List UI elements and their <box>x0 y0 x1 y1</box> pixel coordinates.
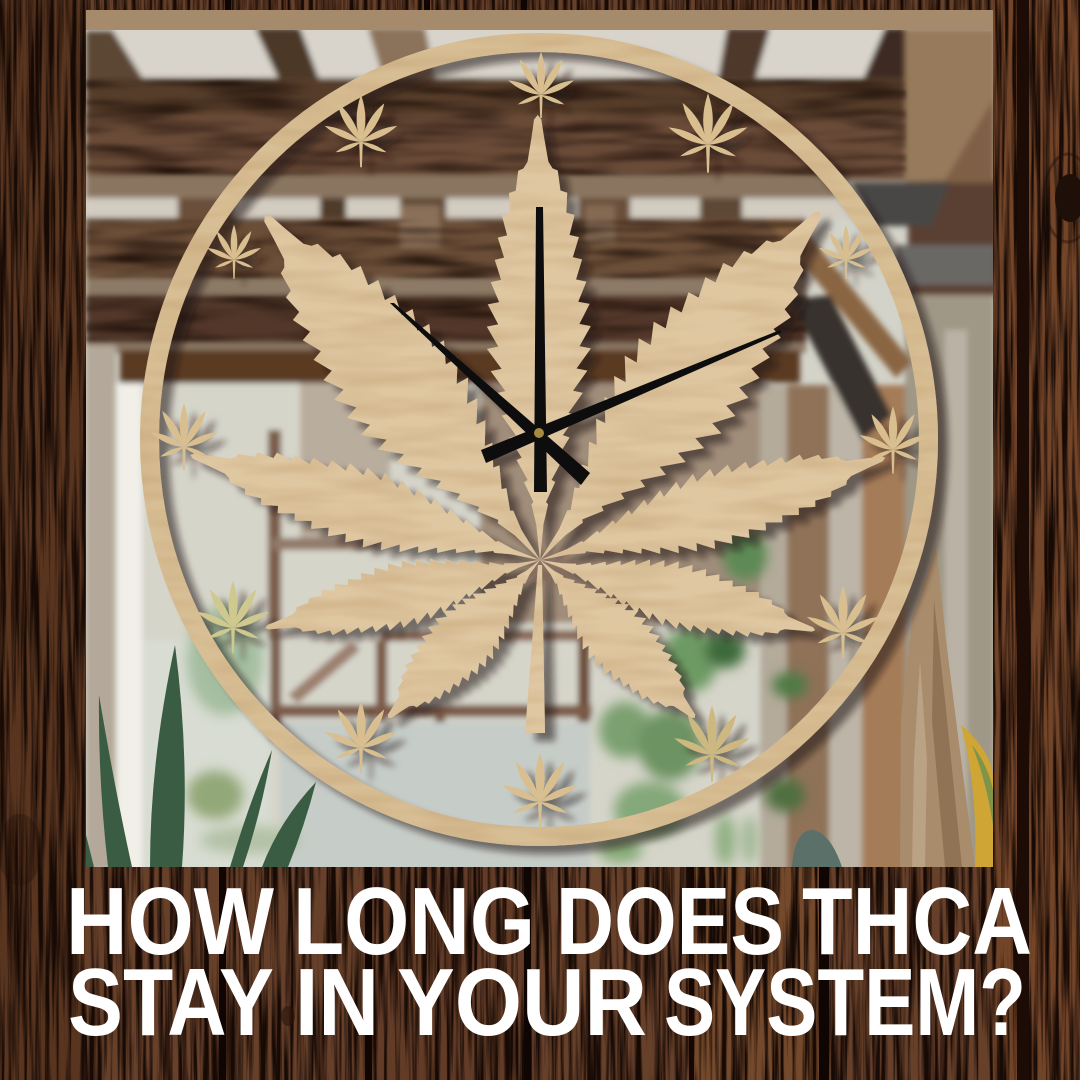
title line 2: IN <box>295 949 379 1056</box>
top wooden strip <box>86 10 993 30</box>
title <box>66 868 1032 1056</box>
title line 2: STAY <box>68 949 274 1056</box>
potted plant greenery <box>187 529 808 866</box>
wooden cannabis leaf wall clock <box>149 42 929 836</box>
snake plant leaves <box>86 645 316 867</box>
photo panel: room with wooden beams <box>86 10 998 875</box>
clock hands <box>390 207 781 492</box>
title line 1: HOW <box>66 868 274 975</box>
large cannabis leaf <box>179 115 896 742</box>
title line 1: LONG <box>293 868 535 975</box>
title line 1 <box>66 868 1032 975</box>
cactus <box>792 830 842 867</box>
small leaf markers around the dial <box>149 52 928 828</box>
tree trunk <box>900 545 975 867</box>
clock outer ring <box>150 42 928 836</box>
blurred room backdrop <box>86 28 998 875</box>
clock wood body <box>150 42 928 836</box>
beam wood texture <box>86 80 906 341</box>
title line 2: YOUR <box>397 949 647 1056</box>
title line 1: THCA <box>802 868 1032 975</box>
title line 1: DOES <box>556 868 784 975</box>
title line 2 <box>68 949 1026 1056</box>
yellow green leaf <box>961 725 993 867</box>
